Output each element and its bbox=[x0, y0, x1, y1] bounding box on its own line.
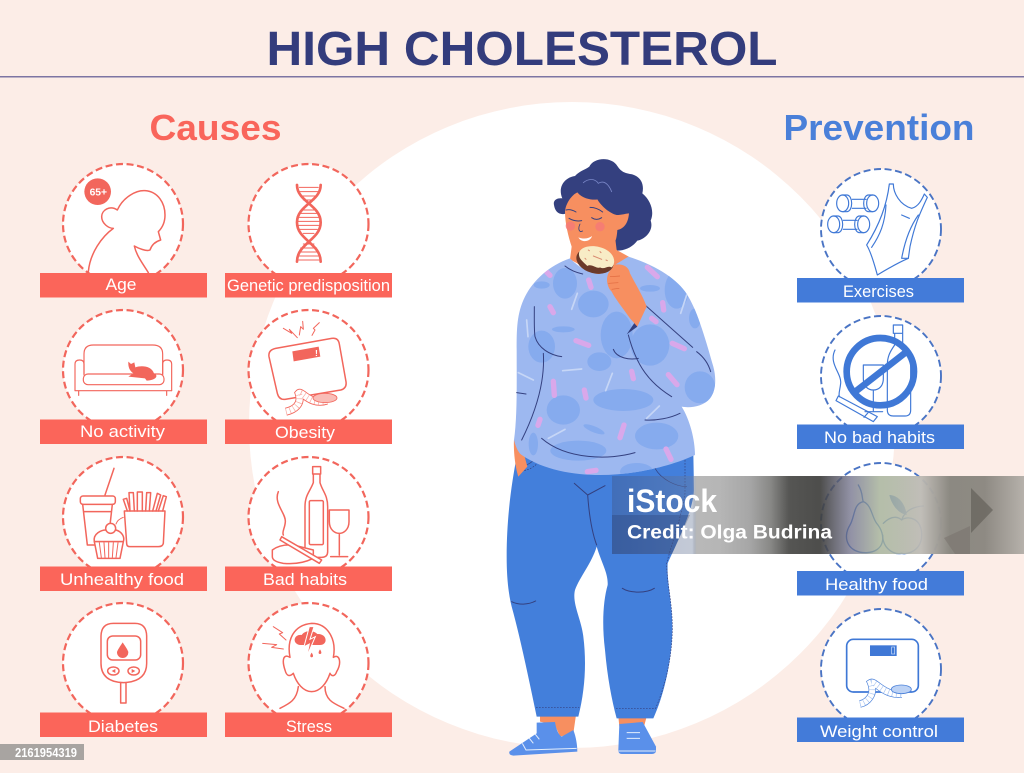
donut bbox=[573, 244, 617, 278]
cause: bad habits: Bad habits bbox=[263, 570, 347, 589]
panel: prevention bbox=[797, 169, 964, 742]
cause: no activity: No activity bbox=[80, 422, 166, 441]
prevention: exercises: Exercises bbox=[843, 282, 914, 301]
cause: diabetes bbox=[40, 603, 207, 737]
cause: age: Age bbox=[106, 275, 136, 294]
cause: age bbox=[40, 164, 207, 298]
prevention: weight control bbox=[797, 609, 964, 742]
prevention: no bad habits: No bad habits bbox=[824, 428, 935, 447]
heading: causes: Causes bbox=[150, 107, 282, 148]
prevention: exercises bbox=[797, 169, 964, 302]
cause: genetic predisposition bbox=[225, 164, 392, 298]
cause: age: 65+ bbox=[90, 187, 107, 198]
prevention: healthy food bbox=[797, 463, 964, 596]
forearm and hand bbox=[627, 321, 637, 334]
white central circle bbox=[249, 102, 895, 748]
cause: obesity: Obesity bbox=[275, 423, 336, 442]
cause: genetic predisposition: Genetic predisposition bbox=[227, 276, 390, 295]
upper body bbox=[514, 159, 715, 480]
illustration: woman eating a donut bbox=[507, 159, 715, 756]
prevention: no bad habits bbox=[797, 316, 964, 449]
prevention: healthy food: Healthy food bbox=[825, 575, 928, 594]
prevention: weight control: Weight control bbox=[820, 722, 938, 741]
jeans and shoes bbox=[507, 453, 694, 756]
cause: stress: Stress bbox=[286, 717, 332, 736]
cause: stress bbox=[225, 603, 392, 737]
watermark logo: iStock bbox=[627, 483, 717, 519]
cause: unhealthy food: Unhealthy food bbox=[60, 570, 184, 589]
watermark credit: Credit: Olga Budrina bbox=[627, 522, 832, 544]
title: HIGH CHOLESTEROL bbox=[266, 23, 778, 76]
panel: causes bbox=[40, 164, 392, 737]
cause: no activity bbox=[40, 310, 207, 444]
heading: prevention: Prevention bbox=[784, 107, 974, 148]
image id tag: 2161954319 bbox=[15, 746, 77, 760]
cause: unhealthy food bbox=[40, 457, 207, 591]
cause: obesity: ! bbox=[315, 348, 318, 358]
cause: bad habits bbox=[225, 457, 392, 591]
cause: diabetes: Diabetes bbox=[88, 717, 158, 736]
watermark banner bbox=[612, 476, 1024, 554]
face and ear bbox=[565, 192, 629, 253]
cause: obesity bbox=[225, 310, 392, 444]
